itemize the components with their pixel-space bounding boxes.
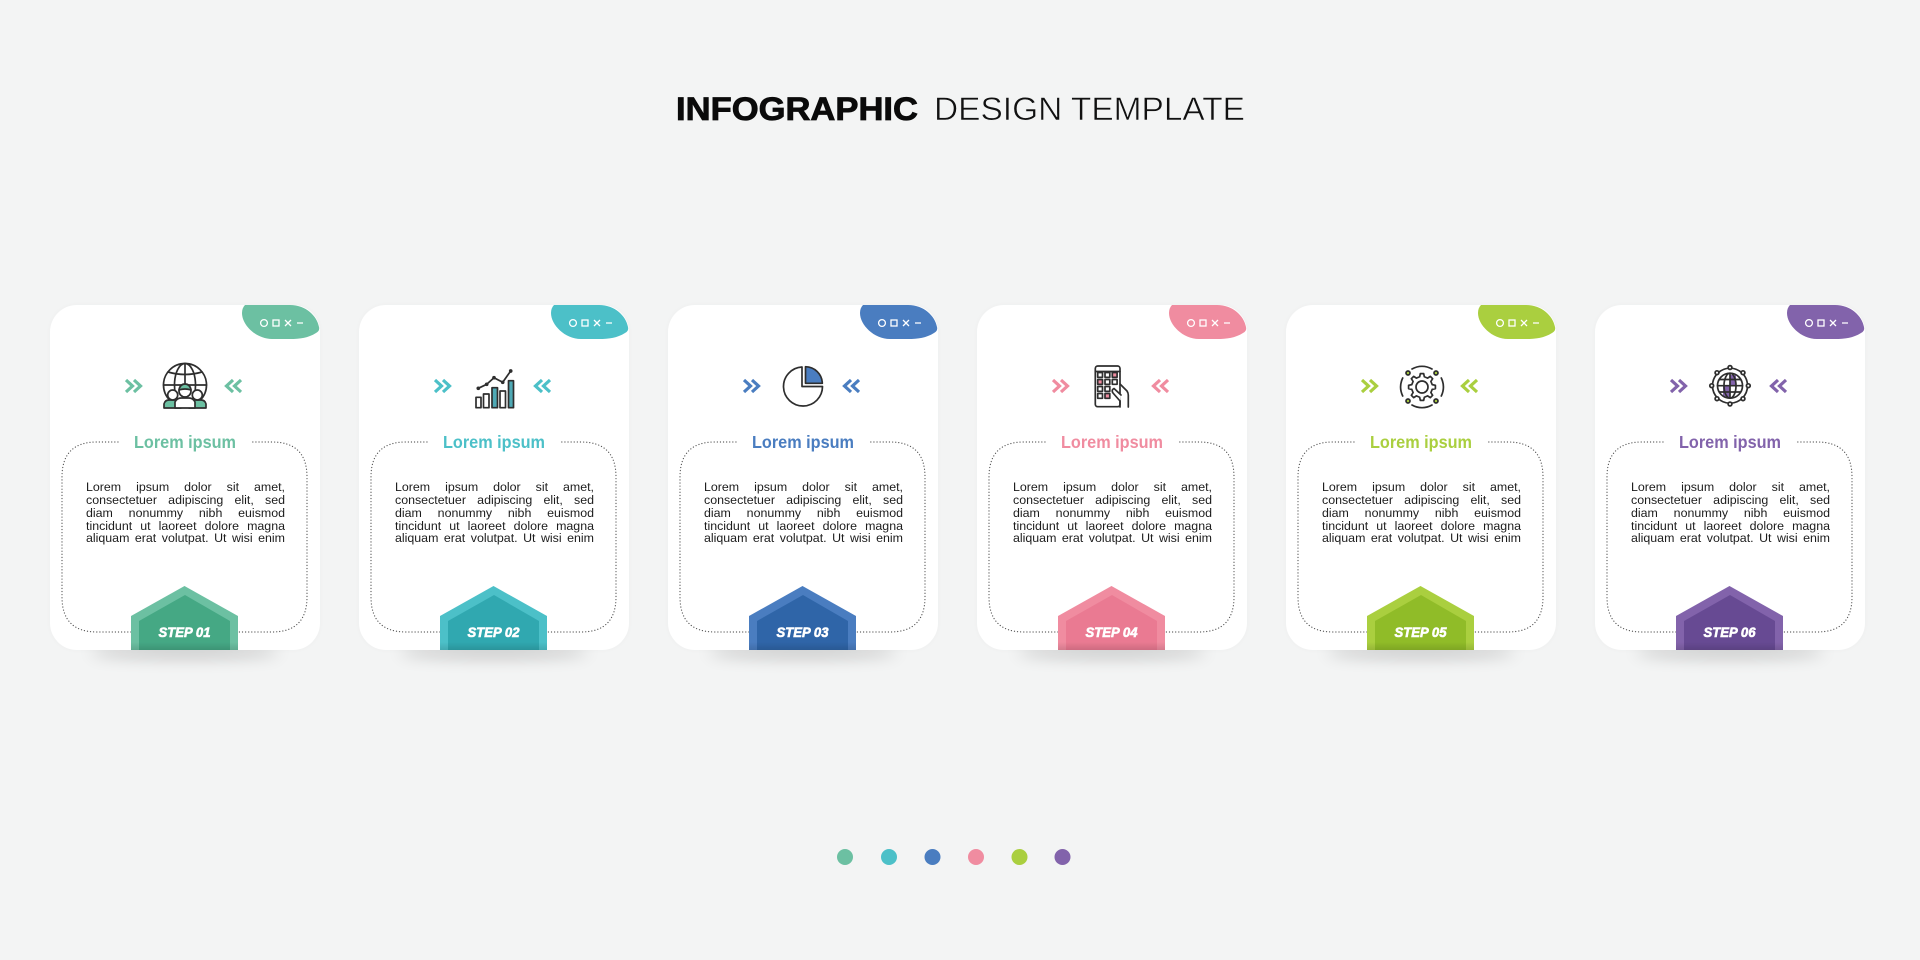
body text: tincidunt ut laoreet dolore magna: [395, 519, 594, 533]
step badge: STEP 05: [1394, 625, 1447, 640]
body text: consectetuer adipiscing elit, sed: [86, 493, 285, 507]
body text: aliquam erat volutpat. Ut wisi enim: [395, 531, 594, 545]
body text: consectetuer adipiscing elit, sed: [1013, 493, 1212, 507]
tab: [1787, 305, 1864, 339]
card shadow: [50, 305, 320, 658]
heading: Lorem ipsum: [1679, 432, 1781, 452]
chevrons left: [126, 380, 140, 392]
card shadow: [1595, 305, 1865, 658]
body text: consectetuer adipiscing elit, sed: [395, 493, 594, 507]
body text: diam nonummy nibh euismod: [1631, 506, 1830, 520]
icon: bar chart: [476, 370, 514, 408]
title: INFOGRAPHIC: [676, 91, 918, 127]
body text: Lorem ipsum dolor sit amet,: [86, 480, 285, 494]
body text: Lorem ipsum dolor sit amet,: [1631, 480, 1830, 494]
chevrons right: [844, 380, 859, 392]
step badge: STEP 04: [1086, 625, 1138, 640]
heading: Lorem ipsum: [1061, 432, 1163, 452]
panel: step 04: [977, 305, 1247, 666]
body text: [1322, 480, 1521, 545]
body text: aliquam erat volutpat. Ut wisi enim: [704, 531, 903, 545]
tab: [242, 305, 319, 339]
card shadow: [668, 305, 938, 658]
step badge: [749, 586, 856, 650]
icon: globe with people: [164, 364, 206, 408]
body text: Lorem ipsum dolor sit amet,: [1013, 480, 1212, 494]
heading: Lorem ipsum: [134, 432, 236, 452]
body text: tincidunt ut laoreet dolore magna: [1013, 519, 1212, 533]
body text: aliquam erat volutpat. Ut wisi enim: [1013, 531, 1212, 545]
body text: aliquam erat volutpat. Ut wisi enim: [1631, 531, 1830, 545]
body text: diam nonummy nibh euismod: [1322, 506, 1521, 520]
frame: [989, 442, 1234, 632]
card graphics: [668, 305, 938, 666]
chevrons left: [1362, 380, 1376, 392]
body text: Lorem ipsum dolor sit amet,: [1322, 480, 1521, 494]
panel: step 01: [50, 305, 320, 666]
tab: [860, 305, 937, 339]
body text: aliquam erat volutpat. Ut wisi enim: [1322, 531, 1521, 545]
title: [676, 91, 1245, 127]
chevrons left: [744, 380, 758, 392]
card shadow: [977, 305, 1247, 658]
chevrons right: [1154, 380, 1168, 392]
colour dots legend: [837, 849, 1070, 865]
body text: Lorem ipsum dolor sit amet,: [704, 480, 903, 494]
chevrons right: [1462, 380, 1477, 392]
tab: [551, 305, 628, 339]
tab: [1478, 305, 1555, 339]
card graphics: [50, 305, 320, 666]
body text: diam nonummy nibh euismod: [395, 506, 594, 520]
step badge: STEP 06: [1704, 625, 1756, 640]
card background: [1286, 305, 1556, 650]
chevrons left: [435, 380, 450, 392]
panel: step 02: [359, 305, 629, 666]
body text: diam nonummy nibh euismod: [1013, 506, 1212, 520]
card background: [50, 305, 320, 650]
body text: [86, 480, 285, 545]
frame: [1607, 442, 1852, 632]
body text: [1013, 480, 1212, 545]
card graphics: [977, 305, 1247, 666]
card background: [977, 305, 1247, 650]
frame: [371, 442, 616, 632]
chevrons right: [536, 380, 550, 392]
chevrons right: [226, 380, 241, 392]
frame: [1298, 442, 1543, 632]
heading: Lorem ipsum: [443, 432, 545, 452]
icon: pie chart: [784, 367, 822, 406]
step badge: STEP 02: [468, 625, 520, 640]
frame: [680, 442, 925, 632]
body text: tincidunt ut laoreet dolore magna: [1322, 519, 1521, 533]
body text: tincidunt ut laoreet dolore magna: [1631, 519, 1830, 533]
title: DESIGN TEMPLATE: [934, 91, 1245, 127]
step badge: [440, 586, 547, 650]
card background: [668, 305, 938, 650]
frame: [62, 442, 307, 632]
card graphics: [1595, 305, 1865, 666]
step badge: [1058, 586, 1165, 650]
chevrons left: [1053, 380, 1068, 392]
step badge: [131, 586, 238, 650]
icon: gear cycle: [1401, 366, 1443, 408]
body text: consectetuer adipiscing elit, sed: [1631, 493, 1830, 507]
panel: step 06: [1595, 305, 1865, 666]
body text: tincidunt ut laoreet dolore magna: [86, 519, 285, 533]
body text: Lorem ipsum dolor sit amet,: [395, 480, 594, 494]
body text: [704, 480, 903, 545]
card shadow: [1286, 305, 1556, 658]
step badge: [1676, 586, 1783, 650]
icon: phone in hand: [1095, 366, 1128, 407]
tab: [1169, 305, 1246, 339]
body text: tincidunt ut laoreet dolore magna: [704, 519, 903, 533]
chevrons right: [1772, 380, 1786, 392]
body text: aliquam erat volutpat. Ut wisi enim: [86, 531, 285, 545]
body text: [1631, 480, 1830, 545]
body text: consectetuer adipiscing elit, sed: [1322, 493, 1521, 507]
card graphics: [1286, 305, 1556, 666]
card background: [359, 305, 629, 650]
card background: [1595, 305, 1865, 650]
chevrons left: [1671, 380, 1686, 392]
panel: step 03: [668, 305, 938, 666]
card graphics: [359, 305, 629, 666]
step badge: [1367, 586, 1474, 650]
body text: diam nonummy nibh euismod: [86, 506, 285, 520]
heading: Lorem ipsum: [1370, 432, 1472, 452]
heading: Lorem ipsum: [752, 432, 854, 452]
step badge: STEP 01: [158, 625, 210, 640]
body text: [395, 480, 594, 545]
card shadow: [359, 305, 629, 658]
step badge: STEP 03: [776, 625, 829, 640]
body text: diam nonummy nibh euismod: [704, 506, 903, 520]
icon: networked globe: [1710, 366, 1750, 406]
body text: consectetuer adipiscing elit, sed: [704, 493, 903, 507]
panel: step 05: [1286, 305, 1556, 666]
